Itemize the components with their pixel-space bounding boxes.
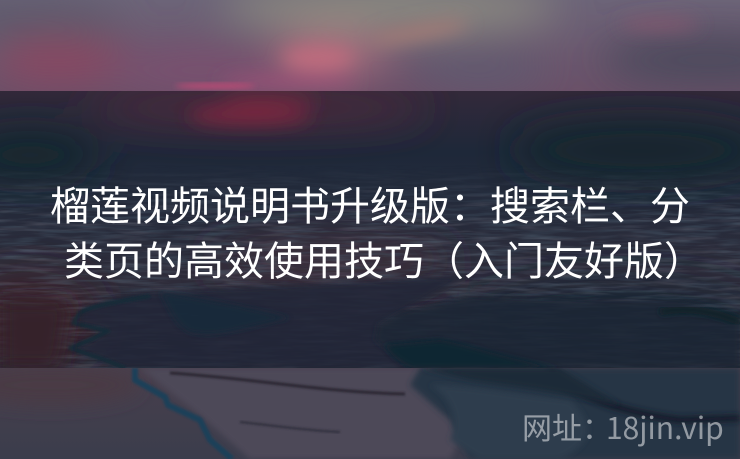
title [50,174,704,287]
watermark: 网址：18jin.vip [522,404,724,448]
lit foreground beach [0,365,740,459]
title: 类页的高效使用技巧（入门友好版） [64,229,704,287]
foam edge: right wave [375,296,740,368]
water texture [0,165,740,368]
sea with sunset reflection [0,91,740,368]
foam edge: left wave [70,275,470,368]
title: 榴莲视频说明书升级版：搜索栏、分 [50,174,690,232]
sky with pink clouds [0,0,740,91]
